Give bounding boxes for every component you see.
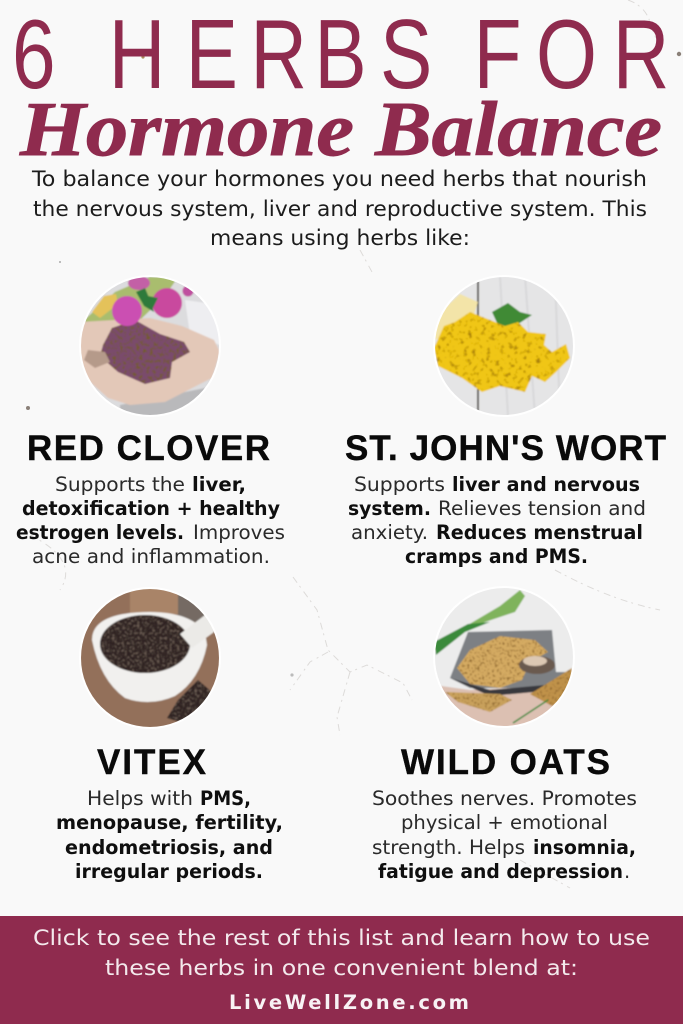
description: red clover: Improves (193, 521, 285, 544)
panel: wild oats (372, 586, 637, 883)
description: St. John's Wort (348, 473, 646, 568)
icon: red clover photo (79, 275, 221, 420)
panel: red clover (16, 275, 285, 568)
icon: vitex photo (79, 587, 221, 729)
description: vitex: endometriosis, and (65, 836, 273, 859)
description: vitex: Helps with (87, 787, 193, 810)
description: St. John's Wort: liver and nervous (452, 473, 640, 496)
intro paragraph: the nervous system, liver and reproductive system. This (33, 197, 647, 222)
icon: wild oats photo (433, 586, 575, 728)
footer call to action text: Click to see the rest of this list and learn how to use (33, 926, 650, 950)
description: St. John's Wort: cramps and PMS. (405, 545, 588, 568)
description: red clover (16, 473, 285, 568)
panel: vitex (56, 587, 283, 883)
description: St. John's Wort: anxiety. (351, 521, 428, 544)
description: wild oats: physical + emotional (401, 811, 608, 834)
description: wild oats: Soothes nerves. Promotes (372, 787, 637, 810)
footer banner (0, 916, 683, 1024)
description: wild oats: strength. Helps (372, 836, 525, 859)
description: red clover: Supports the (55, 473, 185, 496)
description: St. John's Wort: Relieves tension and (438, 497, 646, 520)
title: 6 HERBS FOR: 6 HERBS FOR (12, 0, 669, 109)
heading: VITEX: VITEX (97, 743, 207, 782)
description: St. John's Wort: Supports (354, 473, 445, 496)
description: wild oats: . (624, 860, 630, 883)
panel: St. John's Wort (345, 275, 666, 568)
icon: St. John's Wort photo (433, 275, 575, 417)
description: wild oats: fatigue and depression (378, 860, 623, 883)
description: wild oats (372, 787, 637, 883)
description: vitex: PMS, (200, 787, 251, 810)
intro paragraph: To balance your hormones you need herbs that nourish (31, 167, 647, 192)
footer call to action text (33, 926, 650, 1014)
description: St. John's Wort: system. (348, 497, 431, 520)
description: red clover: acne and inflammation. (32, 545, 270, 568)
description: red clover: detoxification + healthy (22, 497, 280, 520)
intro paragraph (31, 167, 647, 251)
description: vitex: menopause, fertility, (56, 811, 283, 834)
heading: WILD OATS: WILD OATS (401, 743, 610, 782)
heading: RED CLOVER: RED CLOVER (27, 429, 270, 468)
title: Hormone Balance: Hormone Balance (19, 86, 662, 172)
footer call to action text: LiveWellZone.com (229, 991, 469, 1014)
description: red clover: estrogen levels. (16, 521, 184, 544)
footer call to action text: these herbs in one convenient blend at: (105, 956, 578, 980)
description: St. John's Wort: Reduces menstrual (436, 521, 643, 544)
description: vitex (56, 787, 283, 883)
description: wild oats: insomnia, (533, 836, 636, 859)
heading: St. John's Wort: ST. JOHN'S WORT (345, 429, 666, 468)
description: red clover: liver, (192, 473, 246, 496)
description: vitex: irregular periods. (75, 860, 263, 883)
intro paragraph: means using herbs like: (210, 226, 470, 251)
